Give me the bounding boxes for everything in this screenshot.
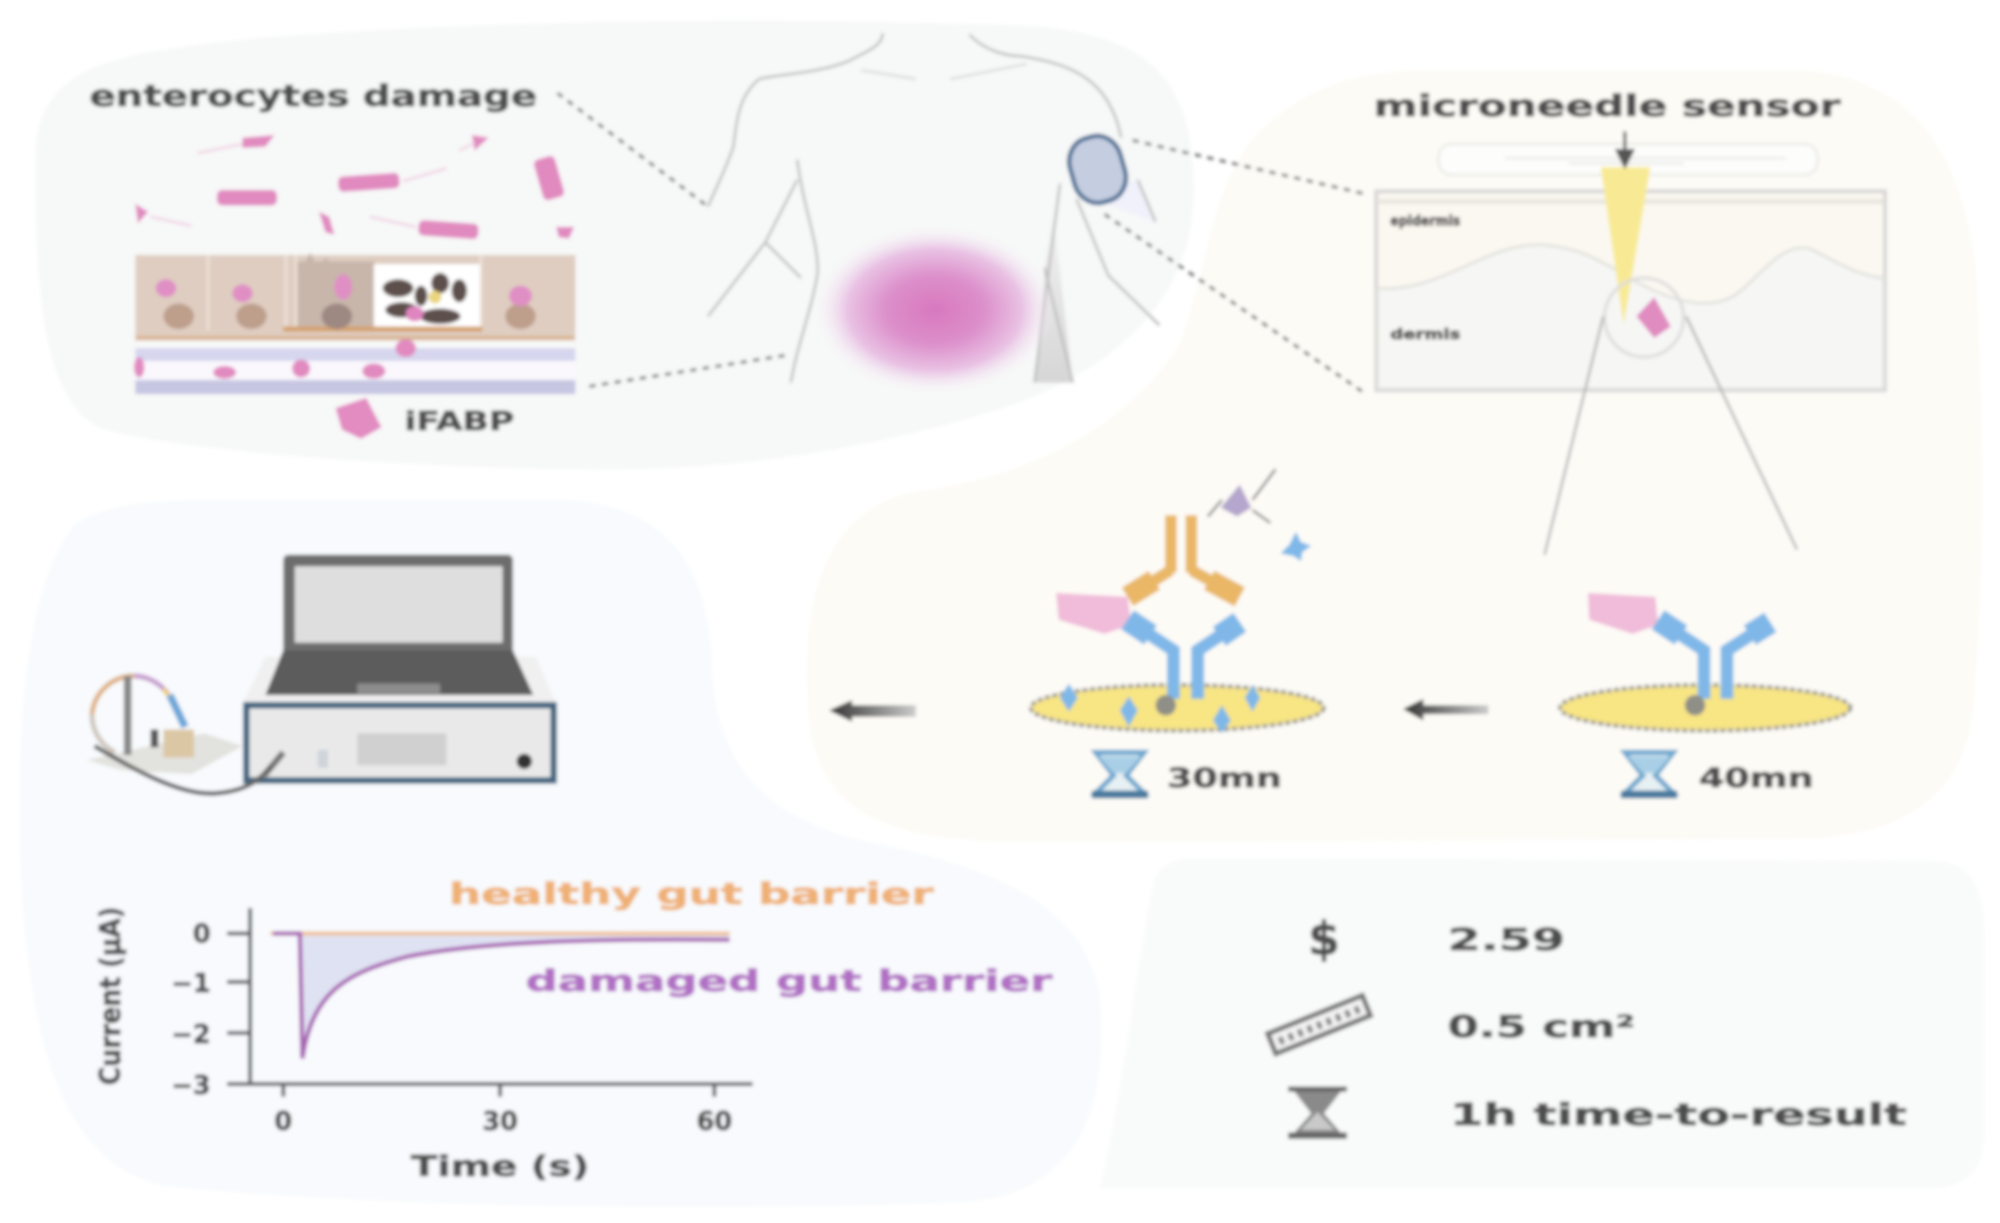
skin cross-section [1376, 191, 1885, 390]
chart: current vs time: Current (µA) [94, 907, 127, 1085]
panel: readout [20, 500, 1102, 1207]
microneedle [1601, 167, 1650, 325]
heading: microneedle sensor: microneedle sensor [1374, 89, 1841, 123]
hourglass 40mn [1621, 752, 1814, 798]
body outline [708, 33, 1159, 383]
bacteria and debris [135, 135, 574, 239]
skin cross-section: epidermis [1390, 214, 1460, 230]
gut inflammation glow [814, 226, 1056, 394]
chart: current vs time: −1 [171, 969, 211, 999]
stat: time to result: 1h time-to-result [1450, 1098, 1907, 1133]
basement membrane [134, 339, 575, 394]
iFABP marker [336, 398, 514, 439]
chart: current vs time: 30 [482, 1107, 518, 1137]
zoom lines [1545, 316, 1797, 555]
assay step: 40mn [1560, 593, 1851, 731]
microneedle patch top [1439, 144, 1817, 175]
hourglass 30mn [1092, 752, 1282, 798]
label: damaged gut barrier: damaged gut barrier [526, 964, 1053, 998]
electrode stand and cable [87, 676, 272, 794]
icon: hourglass [1288, 1087, 1347, 1139]
hourglass 30mn: 30mn [1167, 763, 1282, 794]
hourglass 40mn: 40mn [1699, 763, 1814, 794]
chart: current vs time [94, 907, 753, 1183]
chart: current vs time: Time (s) [411, 1150, 589, 1183]
chart: current vs time: −2 [171, 1020, 211, 1050]
icon: ruler [1268, 995, 1370, 1054]
label: healthy gut barrier: healthy gut barrier [449, 877, 934, 911]
chart: current vs time: 60 [697, 1107, 732, 1137]
panel: sensor [807, 70, 1982, 842]
panel: specs [1099, 858, 1985, 1189]
instrument: potentiostat and laptop [242, 555, 556, 780]
stat: cost: 2.59 [1448, 923, 1565, 958]
panel: damage [35, 21, 1194, 469]
assay step: 30mn [1031, 469, 1324, 733]
iFABP marker: iFABP [404, 407, 514, 437]
stat: area: 0.5 cm² [1448, 1010, 1635, 1045]
icon: dollar: $ [1308, 912, 1340, 966]
chart: current vs time: 0 [193, 919, 211, 949]
arrow: step direction right [1403, 699, 1488, 721]
zoom circle with biomarker [1604, 278, 1684, 357]
arrow: step direction left [829, 700, 916, 722]
chart: current vs time: 0 [274, 1107, 292, 1137]
dashed connector lines [557, 93, 1365, 392]
sensor patch on arm [1063, 130, 1132, 209]
skin cross-section: dermis [1390, 327, 1460, 343]
heading: enterocytes damage: enterocytes damage [89, 79, 537, 113]
chart: current vs time: −3 [171, 1071, 211, 1101]
intestinal epithelium [135, 253, 575, 341]
arrow to microneedle [1617, 131, 1633, 166]
